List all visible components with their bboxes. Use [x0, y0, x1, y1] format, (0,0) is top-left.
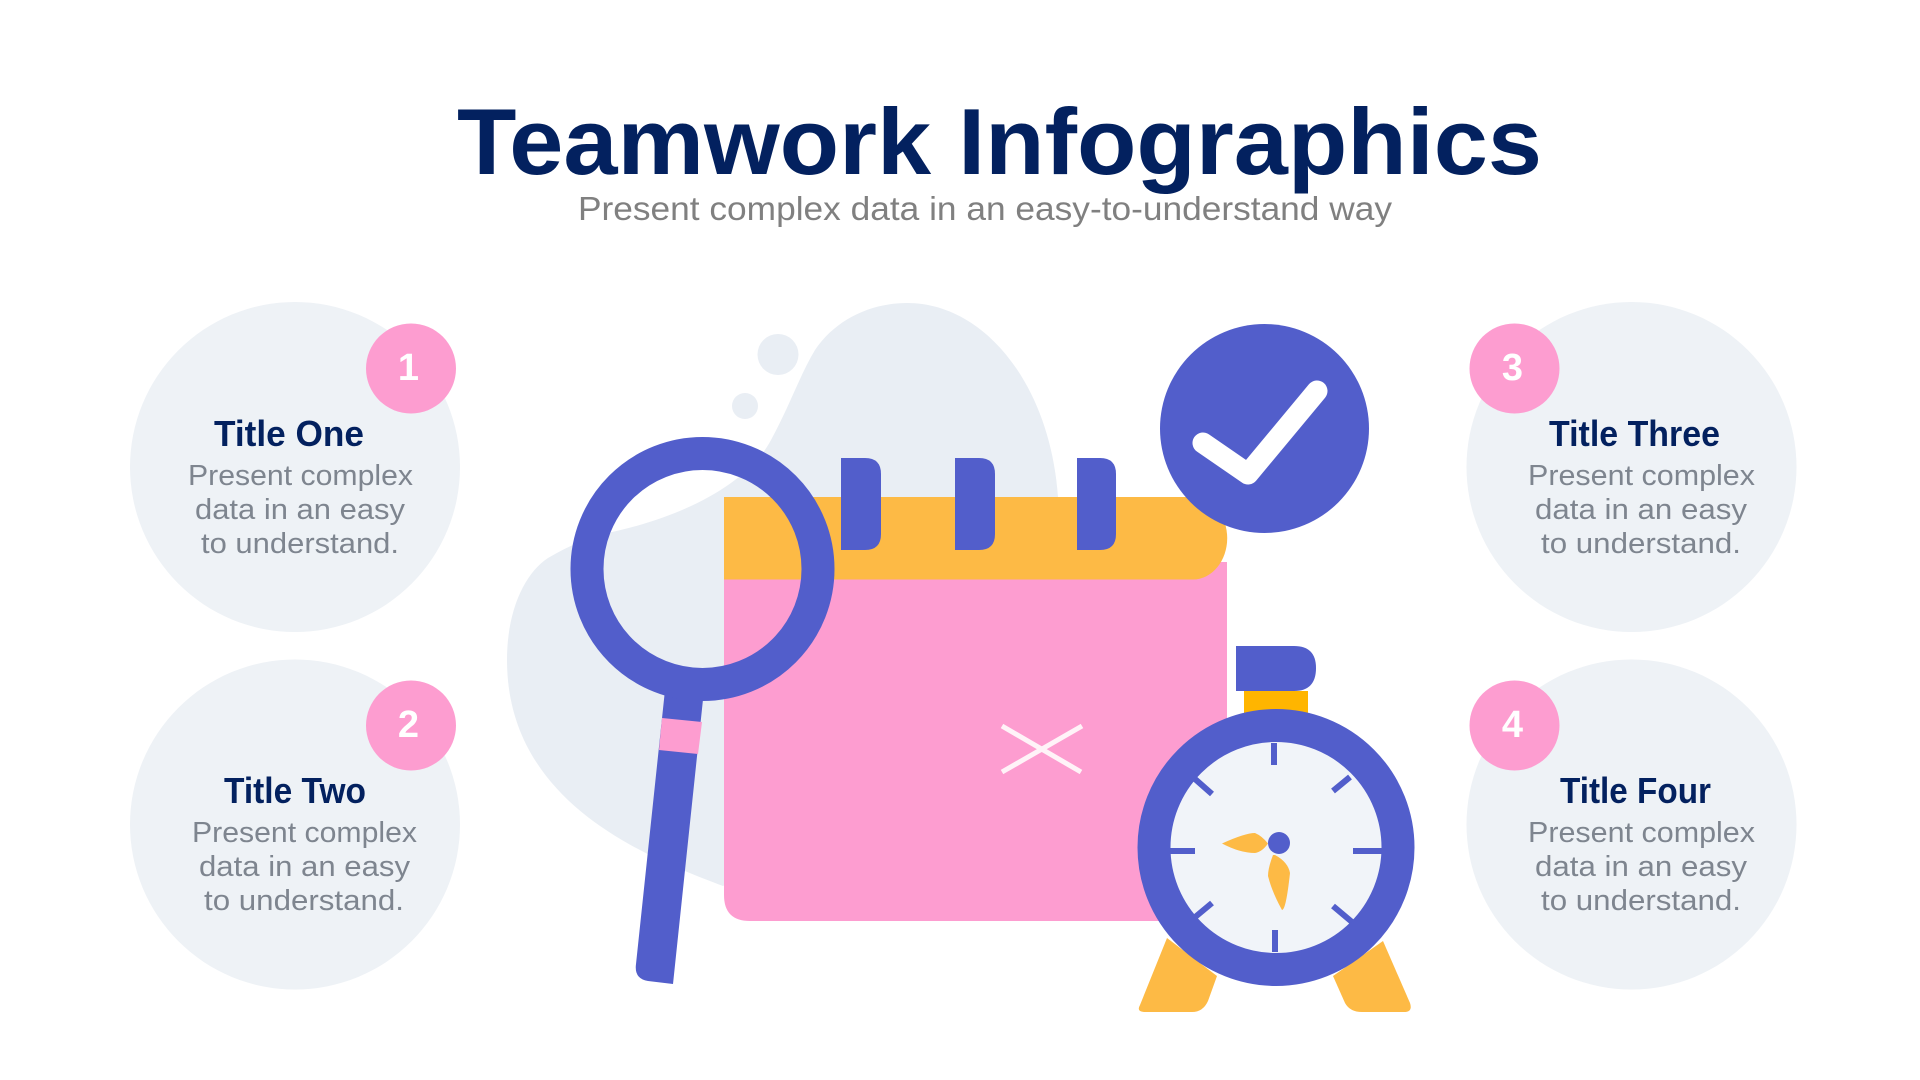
panel: title four: [1466, 660, 1796, 990]
badge: number 4: [1470, 680, 1560, 770]
badge: number 4: 4: [1502, 704, 1523, 746]
badge: number 1: 1: [398, 347, 419, 389]
clock hand: hour: [1268, 855, 1290, 910]
calendar rings: [841, 458, 1116, 550]
icon: magnifying glass: [587, 454, 818, 984]
badge: number 3: 3: [1502, 347, 1523, 389]
icon: check badge: [1160, 324, 1369, 533]
clock feet: [1139, 938, 1411, 1012]
clock face: [1154, 726, 1398, 970]
text: title two description: data in an easy: [199, 851, 411, 883]
text: title two description: Present complex: [192, 817, 418, 849]
badge: number 2: 2: [398, 704, 419, 746]
magnifier handle: [636, 690, 704, 984]
badge: number 1: [366, 324, 456, 414]
clock centre pin: [1268, 832, 1290, 854]
magnifier handle band: [659, 718, 702, 754]
text: title three description: [1528, 460, 1756, 560]
text: title two description: to understand.: [204, 885, 404, 917]
icon: alarm clock: [1139, 646, 1411, 1012]
text: title one description: Present complex: [188, 460, 414, 492]
background blob with bubbles: [507, 303, 1058, 886]
calendar header: [724, 497, 1227, 580]
clock knob: [1236, 646, 1316, 691]
text: title three description: data in an easy: [1535, 494, 1748, 526]
text: title one description: data in an easy: [195, 494, 406, 526]
heading: title two: Title Two: [224, 770, 366, 811]
text: title four description: Present complex: [1528, 817, 1756, 849]
calendar: [724, 458, 1227, 921]
panel: title two: [130, 660, 460, 990]
clock stem: [1244, 691, 1308, 717]
badge: number 3: [1470, 324, 1560, 414]
clock ticks: [1168, 743, 1382, 952]
text: title four description: data in an easy: [1535, 851, 1748, 883]
heading: title three: Title Three: [1549, 413, 1720, 454]
text: title four description: [1528, 817, 1756, 917]
badge: number 2: [366, 680, 456, 770]
text: title one description: [188, 460, 414, 560]
calendar cross mark: [1002, 726, 1082, 772]
heading: title four: Title Four: [1560, 770, 1711, 811]
text: title one description: to understand.: [201, 528, 399, 560]
heading: title one: Title One: [214, 413, 364, 454]
panel: title one: [130, 302, 460, 632]
text: title two description: [192, 817, 418, 917]
panel: title three: [1466, 302, 1796, 632]
text: title three description: to understand.: [1541, 528, 1741, 560]
text: title four description: to understand.: [1541, 885, 1741, 917]
title: Teamwork Infographics: [457, 89, 1542, 194]
text: title three description: Present complex: [1528, 460, 1756, 492]
subtitle: Present complex data in an easy-to-understand way: [578, 190, 1393, 227]
magnifier lens ring: [587, 454, 818, 684]
calendar body: [724, 562, 1227, 921]
clock hand: minute: [1222, 833, 1268, 853]
